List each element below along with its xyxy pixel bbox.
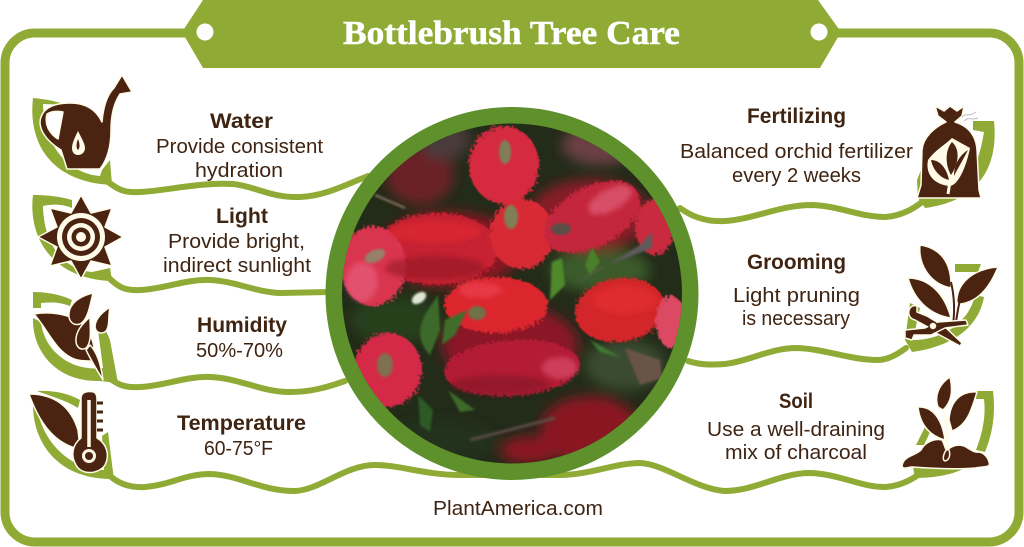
text: soil: mix of charcoal [725, 442, 867, 464]
text: fertilizing [680, 105, 913, 187]
text: light: Provide bright, [168, 231, 305, 253]
text: soil: Soil [779, 390, 813, 413]
text: light: indirect sunlight [163, 255, 311, 277]
text: water [156, 110, 323, 182]
text: fertilizing: Fertilizing [747, 105, 846, 128]
text: fertilizing: Balanced orchid fertilizer [680, 141, 913, 163]
text: light: Light [216, 205, 268, 228]
text: grooming: Light pruning [733, 285, 860, 307]
connector: water [107, 176, 368, 197]
text: light [163, 205, 311, 277]
central photo [334, 116, 690, 472]
photo flowers [340, 126, 686, 407]
text: grooming: is necessary [742, 308, 850, 330]
leaf outline: water [32, 98, 112, 185]
text: fertilizing: every 2 weeks [732, 165, 861, 187]
leaf outline: humidity [33, 292, 118, 383]
text: temperature: Temperature [177, 412, 306, 435]
leaf outline: soil [913, 391, 994, 478]
leaf outline: grooming [905, 264, 984, 352]
text: humidity: 50%-70% [196, 340, 283, 362]
icon: fertilizer bag [917, 106, 981, 198]
icon: pruning leaves and shears [905, 245, 998, 346]
icon: thermometer leaf [29, 392, 107, 472]
icon: seedling in soil [902, 377, 989, 469]
photo pink bristle highlights [346, 179, 657, 395]
text: water: hydration [195, 160, 283, 182]
icon: humidity leaves [34, 293, 110, 380]
text: humidity [196, 314, 287, 362]
icon: watering can [40, 75, 132, 169]
photo foliage [362, 140, 662, 440]
text: soil: Use a well-draining [707, 419, 885, 441]
connector: light [108, 277, 330, 293]
connector: fertilizing [680, 202, 922, 221]
leaf outline: fertilizing [917, 121, 995, 208]
footer: website: PlantAmerica.com [433, 498, 603, 520]
connector: grooming [688, 348, 906, 365]
title: Bottlebrush Tree Care [343, 15, 680, 52]
banner [182, 0, 841, 68]
text: temperature [177, 412, 306, 460]
text: grooming [733, 251, 860, 330]
text: water: Water [210, 110, 273, 133]
leaf outline: light [32, 195, 112, 281]
icon: sun [38, 195, 123, 279]
connector: humidity [108, 377, 345, 392]
text: grooming: Grooming [747, 251, 846, 274]
connector: temperature and soil [108, 463, 922, 491]
leaf outline: temperature [33, 391, 114, 480]
text: humidity: Humidity [197, 314, 287, 337]
text: soil [707, 390, 885, 464]
text: temperature: 60-75°F [204, 438, 273, 460]
text: water: Provide consistent [156, 136, 323, 158]
